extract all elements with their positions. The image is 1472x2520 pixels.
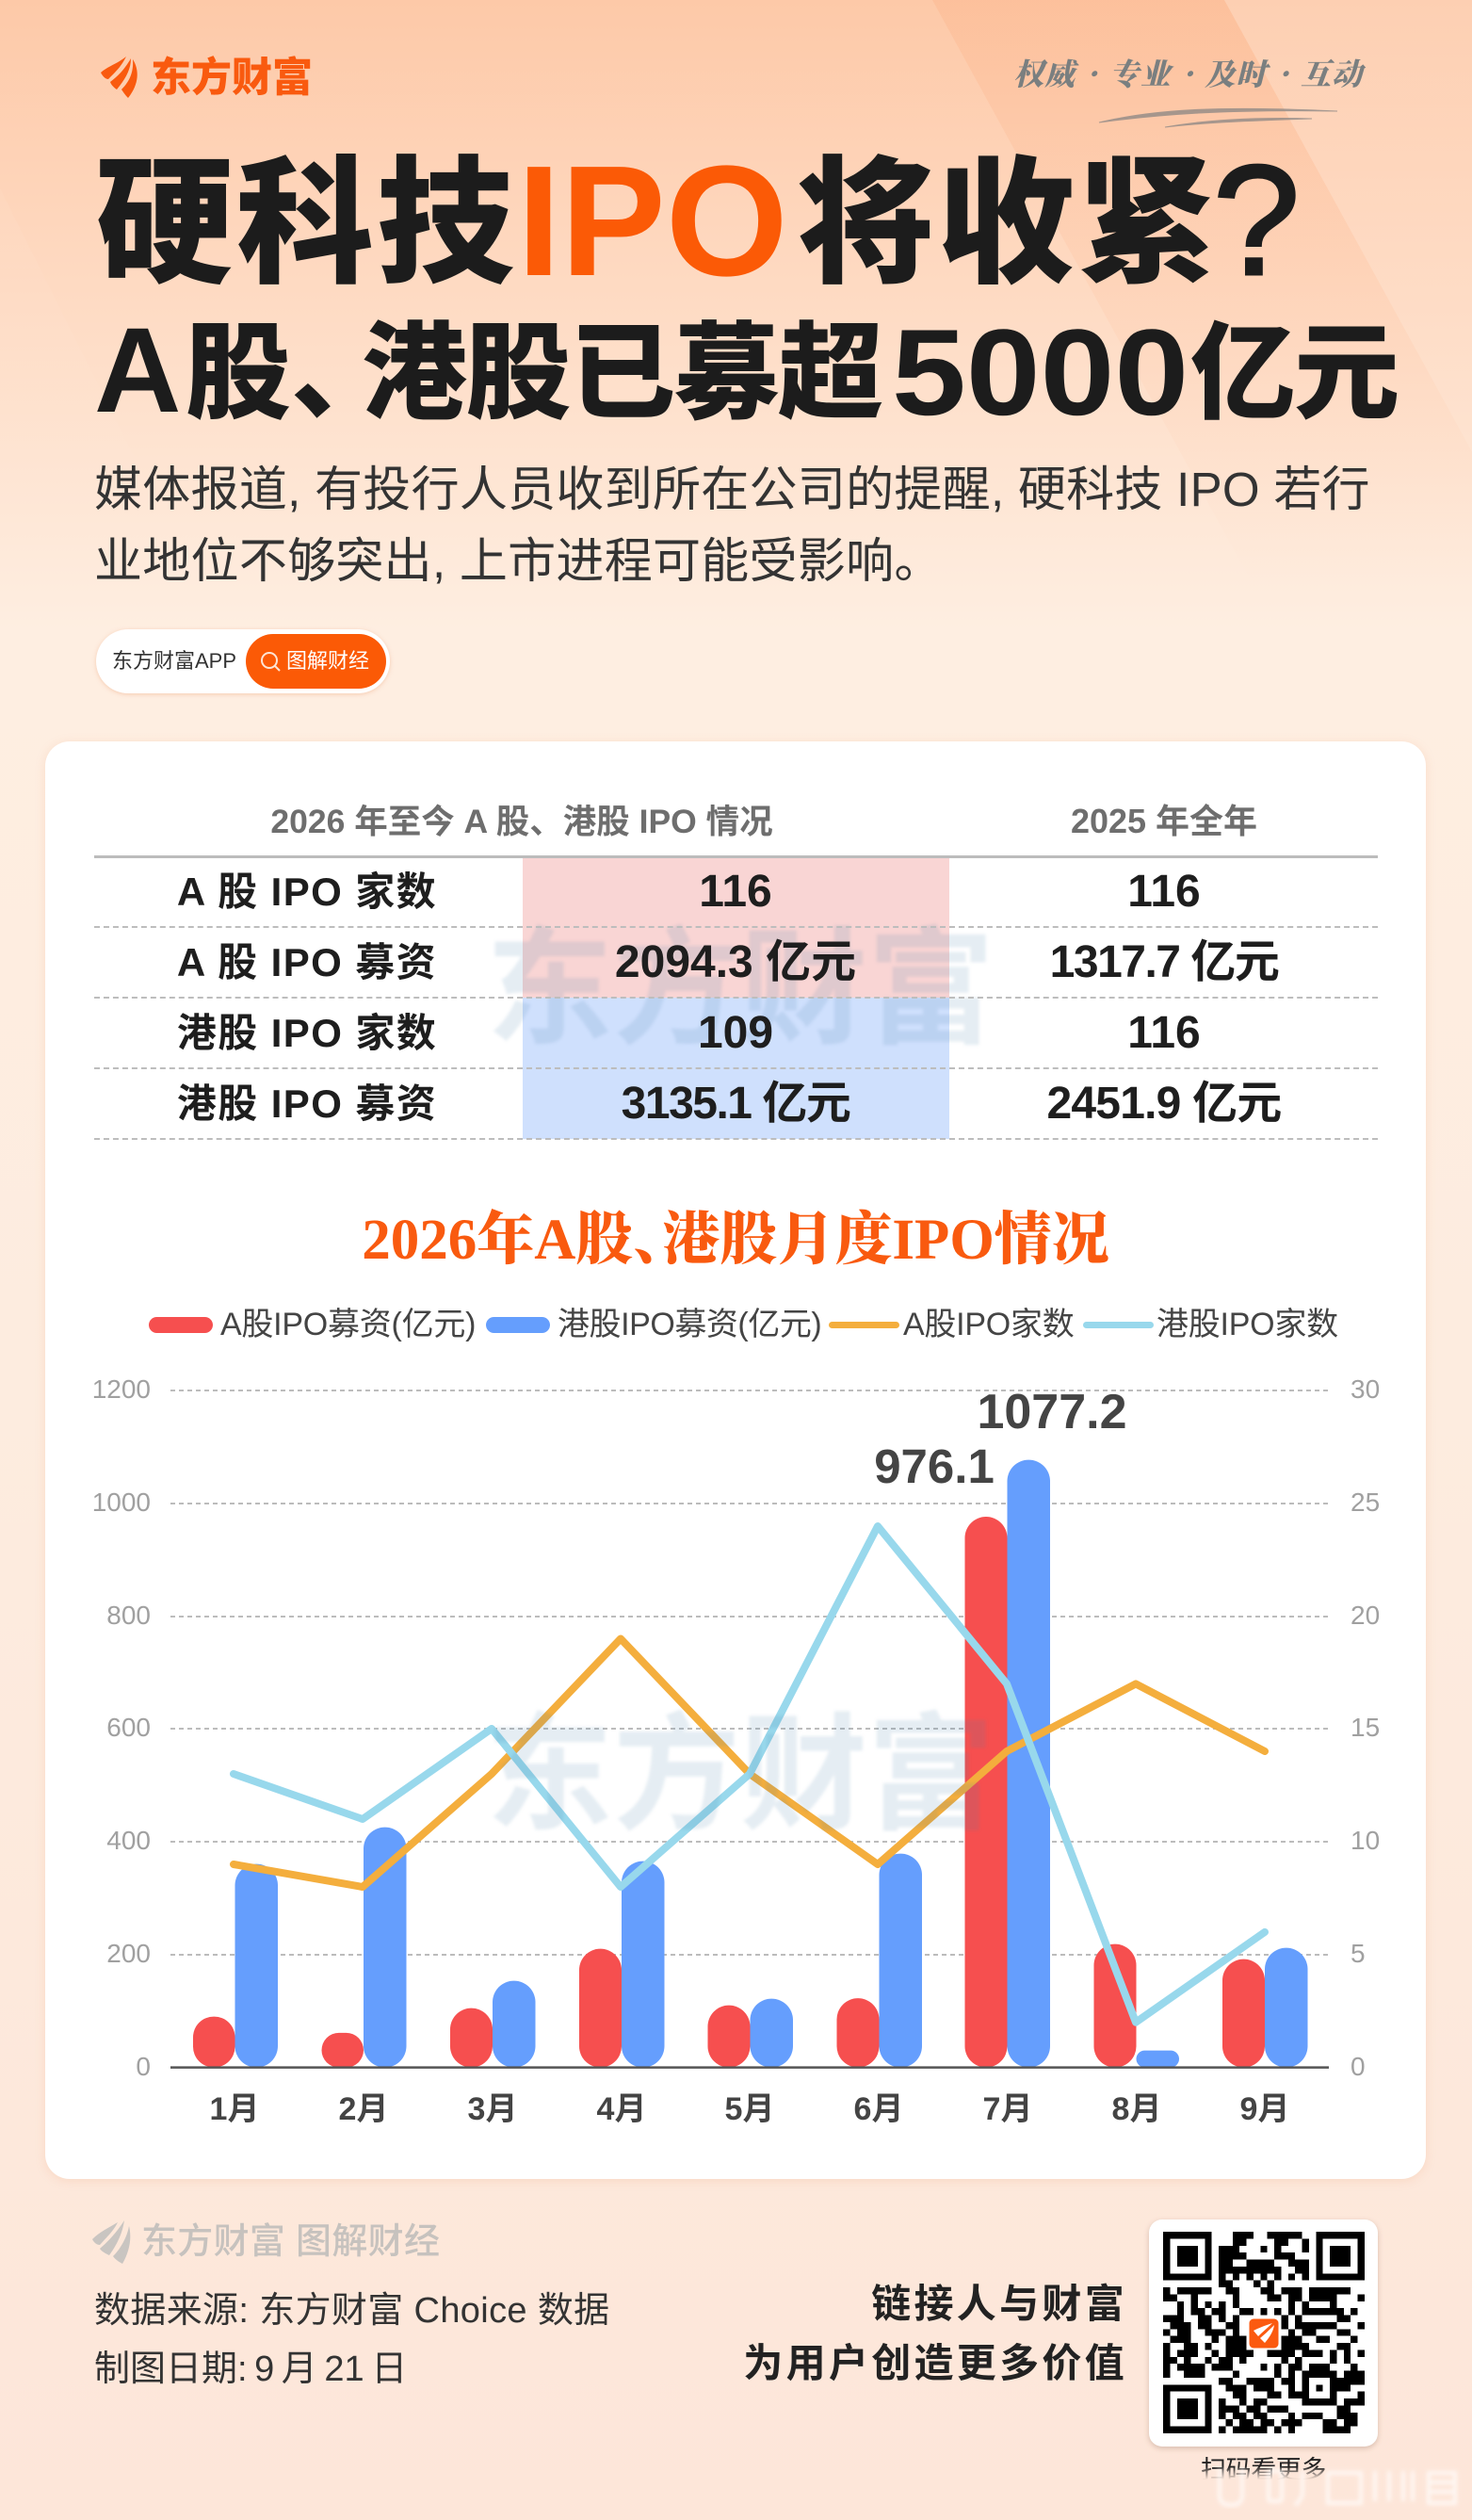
row 1 value 2026: 116 [699, 867, 772, 917]
month labels: 1月 [210, 2091, 259, 2127]
button text: 图解财经 [286, 649, 369, 673]
intro paragraph [94, 463, 1370, 588]
right axis labels: 5 [1351, 1939, 1366, 1968]
legend swatch: HK count [1083, 1322, 1154, 1328]
highlight column: HK shares [523, 998, 949, 1139]
row 2 label: A 股 IPO 募资 [177, 940, 437, 984]
month labels: 2月 [339, 2091, 388, 2127]
title line 2: 港股已募超 [362, 288, 882, 441]
slogan with brush strokes [1013, 51, 1366, 128]
data source: 数据来源: 东方财富 Choice 数据 [94, 2291, 610, 2331]
month labels [210, 2091, 1289, 2127]
table watermark: 东方财富 [486, 886, 995, 1070]
right axis labels: 20 [1351, 1601, 1380, 1630]
brush strokes [1098, 107, 1337, 128]
icon: flame [101, 57, 137, 98]
right axis labels: 25 [1351, 1488, 1380, 1517]
left axis labels: 0 [136, 2052, 151, 2081]
legend label: A share raise: A股IPO募资(亿元) [220, 1307, 476, 1342]
row 1 label: A 股 IPO 家数 [177, 870, 437, 914]
row 4 label: 港股 IPO 募资 [177, 1081, 437, 1126]
right axis labels: 10 [1351, 1826, 1380, 1855]
right axis labels [1351, 1374, 1380, 2081]
title line 1: 硬科技 [96, 113, 517, 312]
intro paragraph: 媒体报道, 有投行人员收到所在公司的提醒, 硬科技 IPO 若行 [94, 463, 1370, 516]
row 4 value 2025: 2451.9 亿元 [1047, 1079, 1281, 1129]
right axis labels: 15 [1351, 1713, 1380, 1742]
row 3 label: 港股 IPO 家数 [177, 1011, 437, 1055]
combo chart: monthly IPO [92, 1374, 1380, 2127]
right axis labels: 30 [1351, 1374, 1380, 1404]
left axis labels: 200 [106, 1939, 151, 1968]
month labels: 7月 [983, 2091, 1032, 2127]
legend swatch: A share raise [149, 1317, 213, 1333]
data label: July A share: 976.1 [874, 1439, 995, 1493]
pill button [246, 634, 386, 689]
data label: July HK: 1077.2 [977, 1385, 1127, 1439]
header rule [94, 855, 1378, 858]
title line 2 [94, 288, 1398, 441]
icon: search [261, 652, 281, 672]
month labels: 5月 [725, 2091, 774, 2127]
line: HK count [234, 1526, 1265, 2023]
chart heading: 2026年A股、港股月度IPO情况 [362, 1209, 1109, 1272]
bars: HK raise [235, 1460, 1307, 2068]
corner watermark [1215, 2466, 1458, 2508]
month labels: 6月 [854, 2091, 903, 2127]
left axis labels: 1200 [92, 1374, 151, 1404]
slogan text: 权威 · 专业 · 及时 · 互动 [1013, 51, 1363, 94]
table: IPO comparison [94, 802, 1378, 1140]
table header 2025: 2025 年全年 [1071, 802, 1257, 840]
left axis labels: 400 [106, 1826, 151, 1855]
title line 2: 5000 [892, 303, 1189, 441]
row 2 value 2025: 1317.7 亿元 [1050, 937, 1278, 987]
QR code [1163, 2232, 1365, 2433]
legend swatch: HK raise [486, 1317, 550, 1333]
tagline 1: 链接人与财富 [871, 2282, 1127, 2326]
month labels: 8月 [1112, 2091, 1161, 2127]
legend label: HK raise: 港股IPO募资(亿元) [558, 1307, 821, 1342]
brand text: 东方财富 图解财经 [141, 2222, 440, 2262]
pill label: 东方财富APP [112, 649, 236, 673]
legend label: HK count: 港股IPO家数 [1157, 1307, 1338, 1342]
logo wordmark: 东方财富 [151, 45, 313, 104]
chart watermark: 东方财富 [486, 1671, 995, 1856]
intro paragraph: 业地位不够突出, 上市进程可能受影响。 [94, 534, 943, 588]
row 3 value 2026: 109 [698, 1008, 773, 1058]
QR code card [1149, 2219, 1378, 2447]
footer brand [92, 2220, 440, 2264]
title line 1: 将收紧 [797, 113, 1218, 312]
line: A share count [234, 1639, 1265, 1887]
tagline 2: 为用户创造更多价值 [743, 2341, 1127, 2385]
title line 2: 亿元 [1190, 288, 1398, 441]
month labels: 3月 [468, 2091, 517, 2127]
QR centre logo [1249, 2319, 1279, 2348]
bars: A share raise [193, 1517, 1265, 2068]
highlight column: A shares [523, 856, 949, 998]
table header 2026: 2026 年至今 A 股、港股 IPO 情况 [270, 803, 773, 840]
title line 2: 股、 [186, 288, 396, 441]
title line 1: IPO [517, 134, 788, 309]
left axis labels: 800 [106, 1601, 151, 1630]
title line 1: ? [1213, 134, 1300, 308]
row 1 value 2025: 116 [1127, 867, 1201, 917]
legend label: A share count: A股IPO家数 [903, 1307, 1074, 1342]
panel: white card [45, 741, 1426, 2179]
chart legend [149, 1307, 1338, 1342]
left axis labels: 600 [106, 1713, 151, 1742]
logo: 东方财富 [101, 45, 313, 104]
tag pill: 东方财富APP 图解财经 [96, 629, 390, 693]
title line 2: A [94, 303, 181, 438]
row 3 value 2025: 116 [1127, 1008, 1201, 1058]
right axis labels: 0 [1351, 2052, 1366, 2081]
left axis labels [92, 1374, 151, 2081]
chart date: 制图日期: 9 月 21 日 [94, 2349, 407, 2389]
month labels: 4月 [597, 2091, 646, 2127]
left axis labels: 1000 [92, 1488, 151, 1517]
title line 1 [96, 113, 1300, 312]
month labels: 9月 [1240, 2091, 1289, 2127]
row 4 value 2026: 3135.1 亿元 [622, 1079, 849, 1129]
legend swatch: A share count [829, 1322, 899, 1328]
row 2 value 2026: 2094.3 亿元 [615, 937, 856, 987]
icon: grey flame [92, 2220, 130, 2264]
